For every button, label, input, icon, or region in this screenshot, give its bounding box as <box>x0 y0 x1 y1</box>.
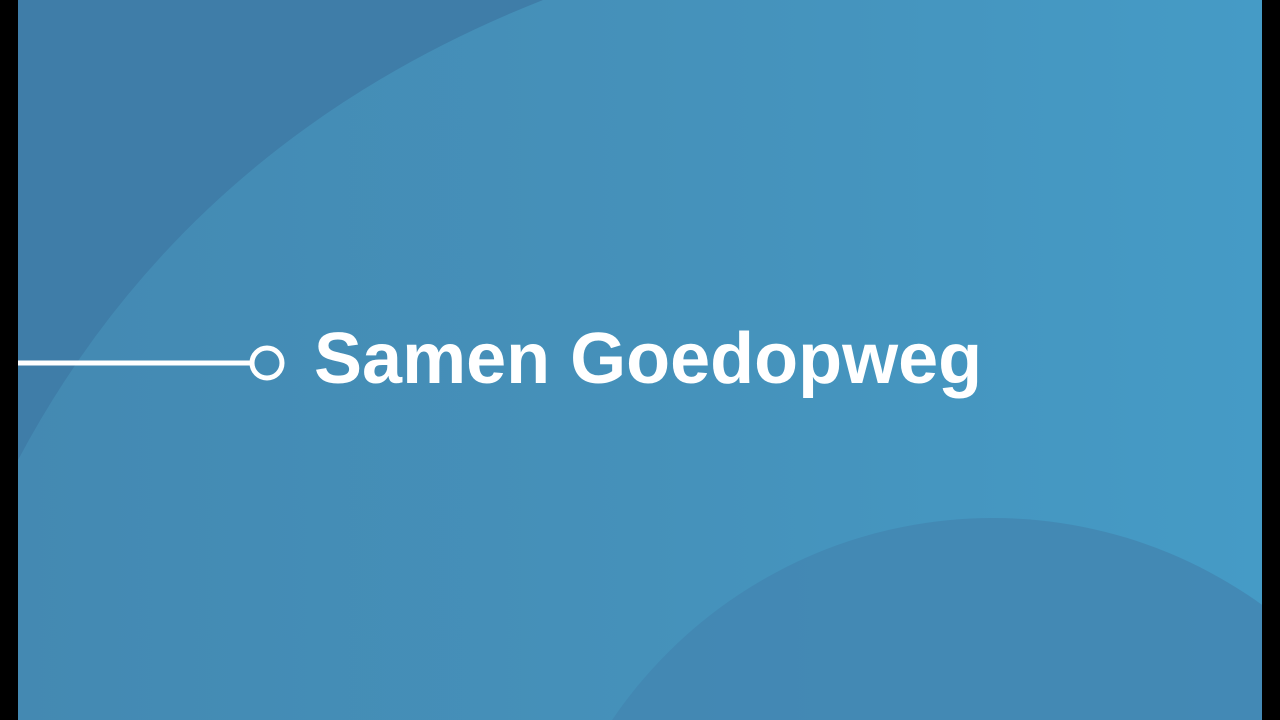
title: Samen Goedopweg <box>314 319 982 399</box>
connector line with circle <box>18 346 284 380</box>
